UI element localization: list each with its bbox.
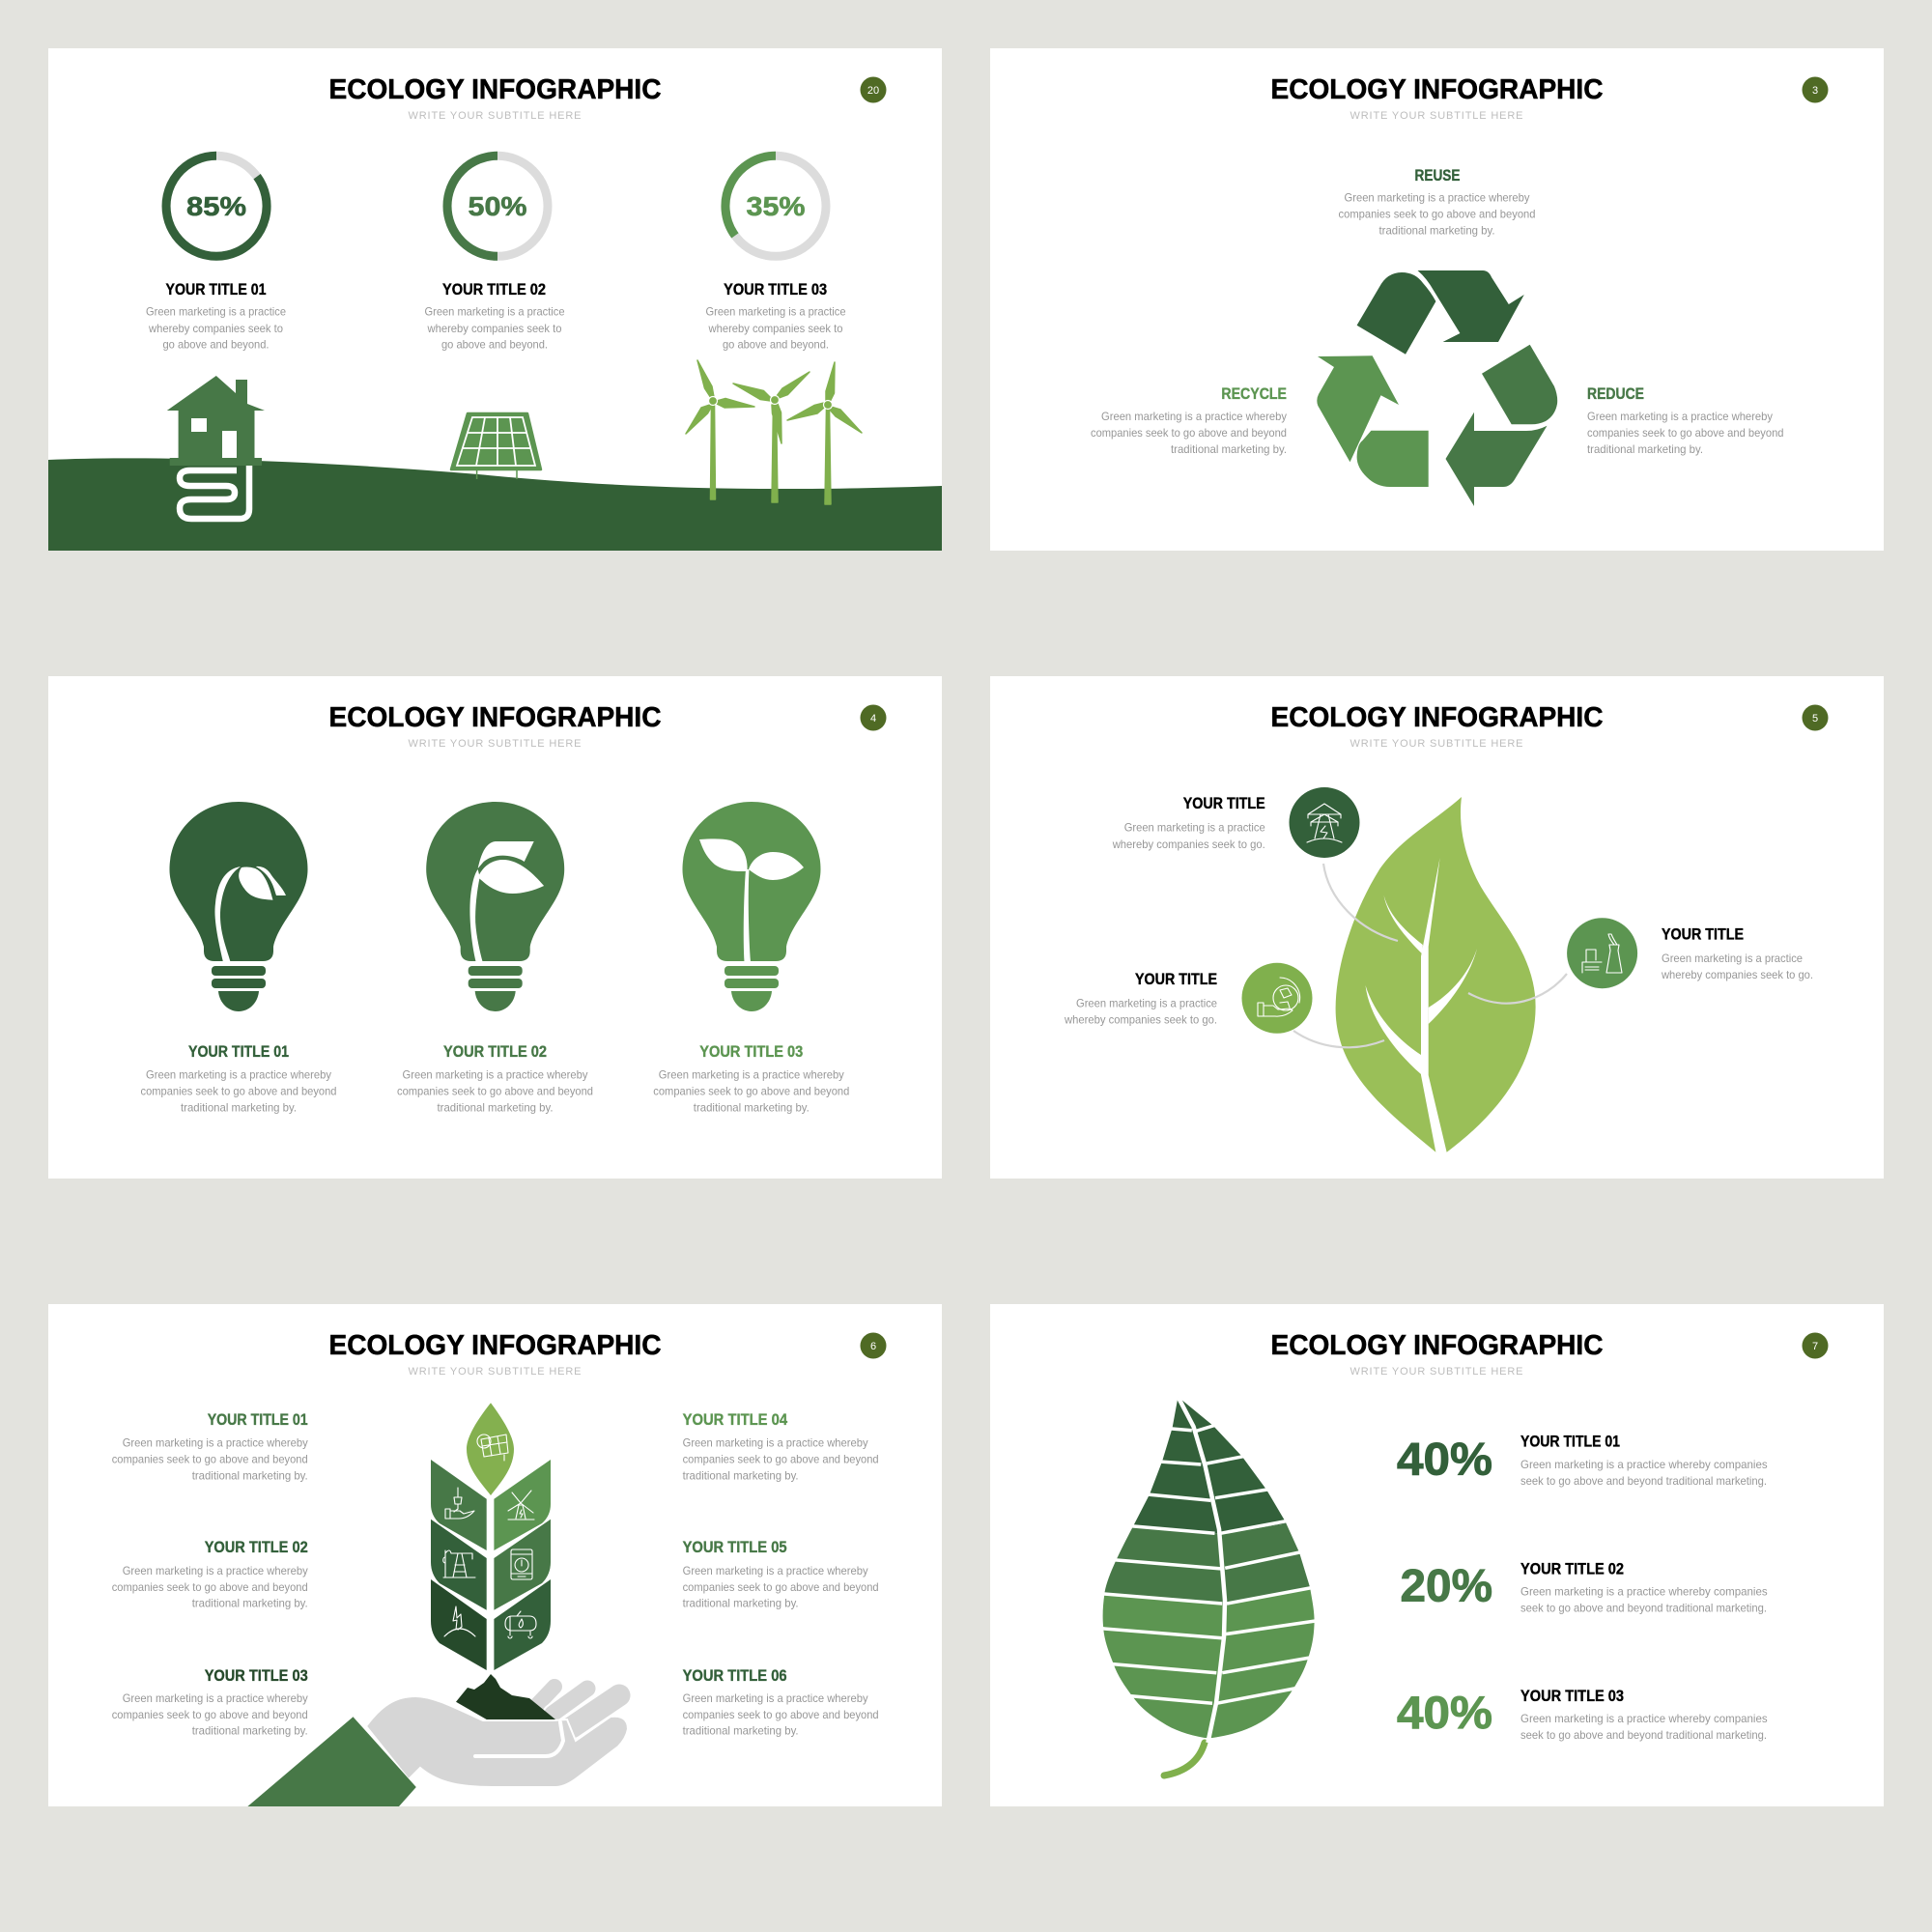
text block 06: Green marketing is a practice whereby: [683, 1691, 868, 1705]
icon: large leaf: [1336, 797, 1536, 1152]
title: ECOLOGY INFOGRAPHIC: [1271, 1330, 1604, 1361]
text block 04: YOUR TITLE 04: [683, 1411, 788, 1429]
stat 03: seek to go above and beyond traditional marketing.: [1520, 1728, 1767, 1742]
stat 01: YOUR TITLE 01: [1520, 1434, 1620, 1451]
subtitle: WRITE YOUR SUBTITLE HERE: [1350, 110, 1522, 122]
text block 02: traditional marketing by.: [437, 1100, 553, 1114]
text block 05: [683, 1539, 879, 1610]
leaf: tier 3 left: [431, 1579, 487, 1670]
text block 01: [141, 1043, 336, 1114]
text block 02: YOUR TITLE 02: [443, 1043, 547, 1061]
icon: wind turbine 1: [686, 360, 754, 499]
text block 05: YOUR TITLE 05: [683, 1539, 787, 1556]
text block 02: go above and beyond.: [441, 338, 548, 352]
icon: power plant: [1567, 918, 1637, 988]
text block 02: whereby companies seek to: [427, 322, 562, 335]
leaf: tier 1 right: [494, 1460, 551, 1550]
text block: recycle: traditional marketing by.: [1171, 442, 1287, 456]
text block 06: YOUR TITLE 06: [683, 1667, 787, 1685]
arrow: reuse: [1357, 270, 1524, 355]
subtitle: WRITE YOUR SUBTITLE HERE: [1350, 1366, 1522, 1378]
text block 02: [397, 1043, 593, 1114]
text block 03: traditional marketing by.: [694, 1100, 810, 1114]
icon: recycle symbol: [1317, 270, 1557, 506]
stat 02: YOUR TITLE 02: [1520, 1560, 1624, 1577]
text block: recycle: Green marketing is a practice whereby: [1101, 410, 1287, 423]
text block 02: companies seek to go above and beyond: [397, 1085, 593, 1098]
text block 03: Green marketing is a practice whereby: [659, 1068, 844, 1082]
text block 03: companies seek to go above and beyond: [112, 1708, 308, 1721]
icon: bulb with half-open sprout: [426, 802, 564, 1011]
text block 01: companies seek to go above and beyond: [141, 1085, 336, 1098]
text block 01: whereby companies seek to: [148, 322, 283, 335]
stat 01: Green marketing is a practice whereby companies: [1520, 1458, 1768, 1471]
page number: 4: [870, 713, 876, 724]
text block 03: traditional marketing by.: [192, 1724, 308, 1738]
icon: power tower: [1289, 787, 1360, 858]
text block 03: go above and beyond.: [723, 338, 829, 352]
text block 04: companies seek to go above and beyond: [683, 1453, 879, 1466]
text block: lower left callout: whereby companies seek to go.: [1064, 1013, 1217, 1027]
text block 03: [705, 281, 846, 352]
text block 03: companies seek to go above and beyond: [653, 1085, 849, 1098]
arrow: recycle: [1317, 355, 1429, 487]
icon: house with geothermal pipe: [167, 376, 265, 519]
icon: open hand: [366, 1687, 628, 1787]
text block: lower left callout: YOUR TITLE: [1135, 971, 1217, 988]
soil: [456, 1674, 555, 1719]
icon: segmented leaf: [1103, 1400, 1315, 1743]
text block 03: YOUR TITLE 03: [724, 281, 827, 298]
stat 03: [1397, 1687, 1768, 1742]
text block: top left callout: Green marketing is a practice: [1124, 821, 1265, 835]
text block: right callout: Green marketing is a practice: [1662, 952, 1803, 965]
icon: solar panel: [451, 413, 541, 479]
page number: 5: [1812, 713, 1818, 724]
subtitle: WRITE YOUR SUBTITLE HERE: [408, 110, 582, 122]
page number: 6: [870, 1341, 876, 1352]
text block 02: traditional marketing by.: [192, 1597, 308, 1610]
text block: lower left callout: [1064, 971, 1217, 1027]
text block: lower left callout: Green marketing is a practice: [1076, 996, 1217, 1009]
text block 03: Green marketing is a practice: [705, 305, 846, 319]
text block: reduce: [1587, 385, 1783, 456]
text block: reuse: Green marketing is a practice whereby: [1345, 191, 1530, 205]
stat 02: 20%: [1401, 1559, 1492, 1610]
text block: reduce: REDUCE: [1587, 385, 1644, 403]
panel: leaf with callouts: [990, 676, 1884, 1179]
page number: 20: [867, 85, 879, 97]
icon: wind turbine 3: [787, 362, 862, 504]
text block 03: [653, 1043, 849, 1114]
text block: reuse: REUSE: [1414, 167, 1461, 185]
text block 01: Green marketing is a practice whereby: [146, 1068, 331, 1082]
page number: [1803, 77, 1828, 102]
title: ECOLOGY INFOGRAPHIC: [328, 1330, 662, 1361]
text block 03: whereby companies seek to: [708, 322, 843, 335]
panel: recycle: [990, 48, 1884, 551]
text block 03: Green marketing is a practice whereby: [123, 1691, 308, 1705]
text block 01: YOUR TITLE 01: [208, 1411, 308, 1429]
value 35%: 35%: [746, 191, 806, 221]
stat 01: seek to go above and beyond traditional marketing.: [1520, 1474, 1767, 1488]
plant: [431, 1403, 551, 1670]
text block 05: companies seek to go above and beyond: [683, 1580, 879, 1594]
text block 01: YOUR TITLE 01: [188, 1043, 289, 1061]
text block 01: [146, 281, 286, 352]
stat 02: seek to go above and beyond traditional marketing.: [1520, 1602, 1767, 1615]
text block 04: traditional marketing by.: [683, 1468, 799, 1482]
leaf: tier 2 right: [494, 1520, 551, 1610]
text block 02: [112, 1539, 308, 1610]
text block 01: traditional marketing by.: [192, 1468, 308, 1482]
text block: reuse: [1339, 167, 1536, 237]
text block: recycle: RECYCLE: [1221, 385, 1287, 403]
ring 50%: [447, 156, 548, 256]
ring 35%: [725, 156, 826, 256]
page number: [860, 1333, 887, 1358]
text block 02: Green marketing is a practice: [425, 305, 565, 319]
text block 04: [683, 1411, 879, 1482]
title: ECOLOGY INFOGRAPHIC: [328, 702, 662, 733]
panel: plant in hand: [48, 1304, 942, 1806]
subtitle: WRITE YOUR SUBTITLE HERE: [1350, 738, 1522, 750]
page number: [860, 77, 887, 102]
title: ECOLOGY INFOGRAPHIC: [1271, 702, 1604, 733]
text block: right callout: YOUR TITLE: [1662, 926, 1744, 944]
stat 03: Green marketing is a practice whereby companies: [1520, 1712, 1768, 1725]
ring 85%: [166, 156, 267, 256]
leaf: tier 2 left: [431, 1520, 487, 1610]
text block: right callout: [1661, 926, 1813, 981]
page number: 3: [1812, 85, 1818, 97]
icon: leaf stem: [1164, 1743, 1205, 1776]
leaf: tier 1 left: [431, 1460, 487, 1550]
text block 03: YOUR TITLE 03: [205, 1667, 308, 1685]
text block 01: traditional marketing by.: [181, 1100, 297, 1114]
text block: reduce: companies seek to go above and beyond: [1587, 426, 1783, 440]
stat 01: 40%: [1397, 1434, 1492, 1485]
stat 03: YOUR TITLE 03: [1520, 1688, 1624, 1705]
text block: top left callout: whereby companies seek to go.: [1112, 838, 1265, 851]
arrow: reduce: [1445, 345, 1557, 506]
text block 04: Green marketing is a practice whereby: [683, 1436, 868, 1450]
text block 02: YOUR TITLE 02: [442, 281, 546, 298]
subtitle: WRITE YOUR SUBTITLE HERE: [408, 1366, 582, 1378]
stat 02: Green marketing is a practice whereby companies: [1520, 1585, 1768, 1599]
icon: bulb with open sprout: [682, 802, 821, 1011]
text block: right callout: whereby companies seek to go.: [1661, 968, 1813, 981]
title: ECOLOGY INFOGRAPHIC: [328, 74, 662, 105]
text block 05: Green marketing is a practice whereby: [683, 1564, 868, 1577]
page number: [1803, 705, 1828, 730]
leaf: top: [467, 1403, 514, 1495]
stat 03: 40%: [1397, 1687, 1492, 1738]
text block 02: Green marketing is a practice whereby: [402, 1068, 587, 1082]
text block 03: YOUR TITLE 03: [699, 1043, 803, 1061]
icon: wind turbine 2: [733, 372, 810, 502]
value 50%: 50%: [468, 191, 527, 221]
panel: segmented leaf: [990, 1304, 1884, 1806]
text block 05: traditional marketing by.: [683, 1597, 799, 1610]
text block 06: companies seek to go above and beyond: [683, 1708, 879, 1721]
text block 02: Green marketing is a practice whereby: [123, 1564, 308, 1577]
value 85%: 85%: [186, 191, 246, 221]
page number: [860, 705, 887, 730]
text block 01: companies seek to go above and beyond: [112, 1453, 308, 1466]
text block: reduce: traditional marketing by.: [1587, 442, 1703, 456]
text block 03: [112, 1667, 308, 1738]
subtitle: WRITE YOUR SUBTITLE HERE: [408, 738, 582, 750]
text block 06: traditional marketing by.: [683, 1724, 799, 1738]
text block: top left callout: [1112, 795, 1265, 851]
connector lines: [1293, 864, 1567, 1047]
text block 01: Green marketing is a practice whereby: [123, 1436, 308, 1450]
icon: globe on hand: [1242, 963, 1312, 1034]
text block: recycle: companies seek to go above and beyond: [1091, 426, 1287, 440]
text block: recycle: [1091, 385, 1287, 456]
panel: progress rings and renewable scene: [48, 48, 942, 551]
text block 02: YOUR TITLE 02: [205, 1539, 308, 1556]
leaf: tier 3 right: [494, 1579, 551, 1670]
page number: [1803, 1333, 1828, 1358]
sleeve: [247, 1717, 416, 1806]
text block 02: [425, 281, 565, 352]
stat 02: [1401, 1559, 1768, 1615]
panel: light bulbs: [48, 676, 942, 1179]
stat 01: [1397, 1434, 1768, 1488]
text block 02: companies seek to go above and beyond: [112, 1580, 308, 1594]
title: ECOLOGY INFOGRAPHIC: [1271, 74, 1604, 105]
text block 06: [683, 1667, 879, 1738]
text block 01: go above and beyond.: [162, 338, 269, 352]
text block: reuse: companies seek to go above and beyond: [1339, 208, 1536, 221]
text block 01: YOUR TITLE 01: [166, 281, 267, 298]
text block 01: Green marketing is a practice: [146, 305, 286, 319]
text block: reuse: traditional marketing by.: [1379, 223, 1495, 237]
text block: reduce: Green marketing is a practice whereby: [1587, 410, 1773, 423]
page number: 7: [1812, 1341, 1818, 1352]
text block 01: [112, 1411, 308, 1482]
icon: bulb with closed sprout: [170, 802, 307, 1011]
text block: top left callout: YOUR TITLE: [1183, 795, 1265, 812]
ground hill: [48, 458, 942, 551]
